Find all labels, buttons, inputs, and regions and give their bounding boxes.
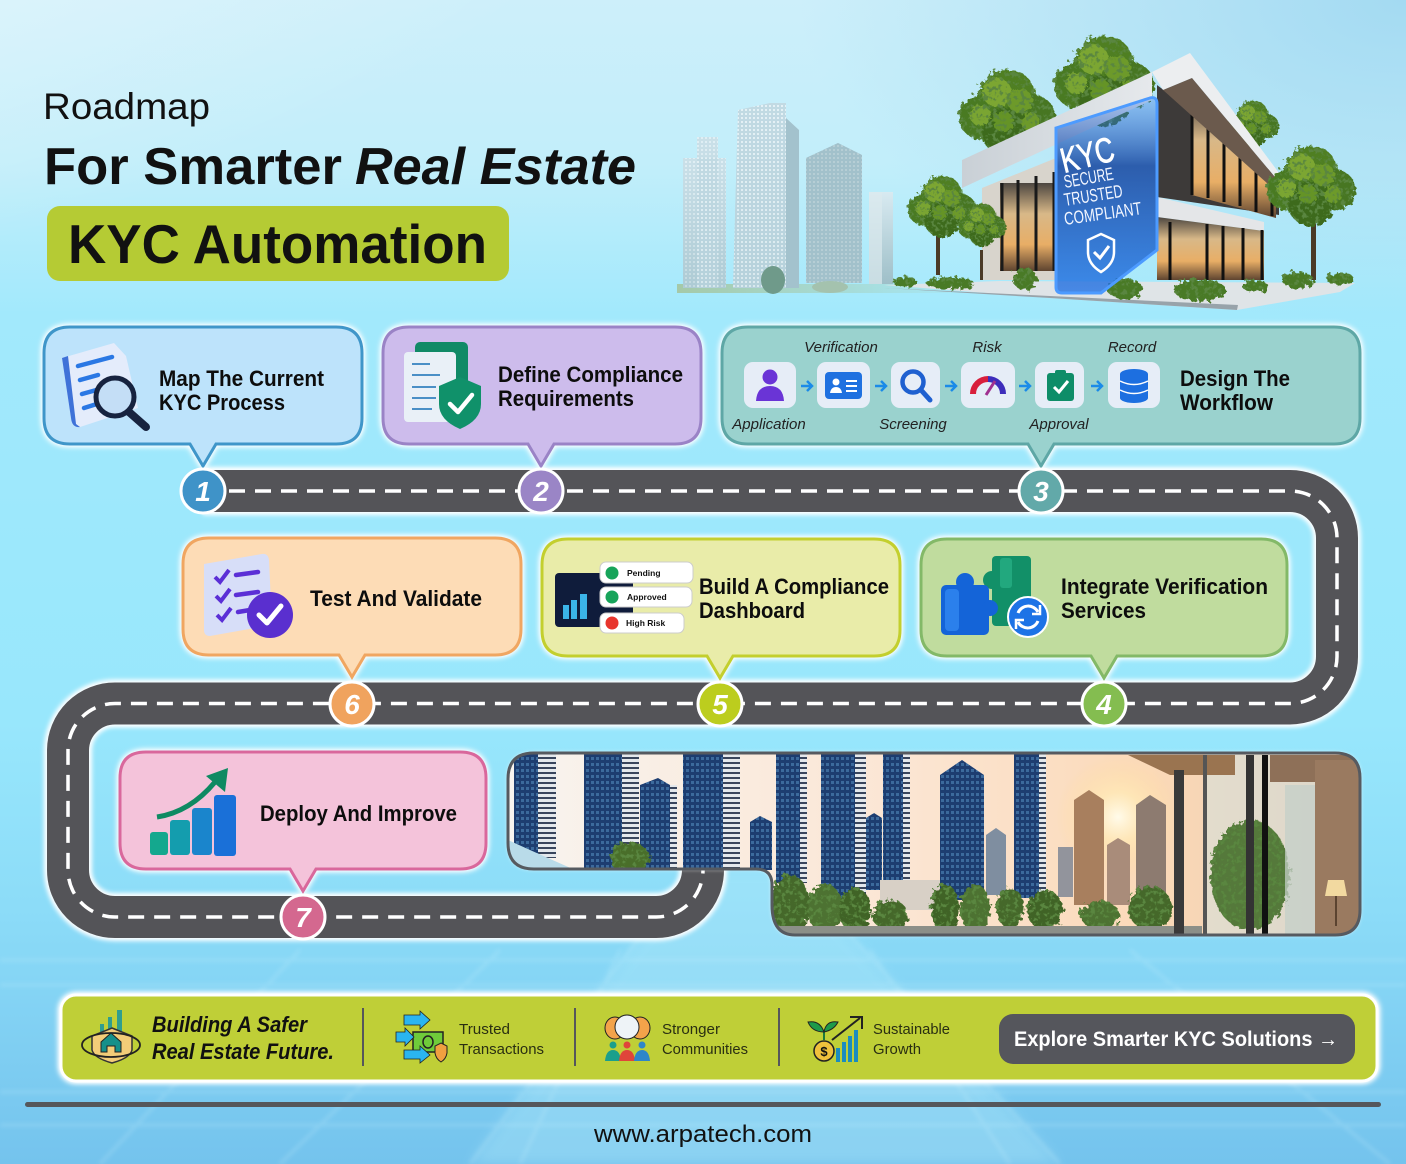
tagline: Real Estate Future. <box>152 1039 334 1064</box>
icon: approval clipboard <box>1047 370 1074 401</box>
workflow labels: Record <box>1108 339 1157 356</box>
front trees <box>908 146 1355 280</box>
step marker 7: 7 <box>295 902 312 933</box>
workflow labels: Approval <box>1028 416 1089 433</box>
hero image: pale skyline <box>677 103 977 294</box>
step marker 1 <box>181 469 225 513</box>
glass KYC panel: TRUSTED <box>1062 181 1124 210</box>
step marker 3: 3 <box>1033 476 1049 507</box>
step marker 5 <box>698 682 742 726</box>
step 4 bubble: Integrate Verification Services: Services <box>1061 598 1146 623</box>
icon: sustainable growth <box>808 1017 862 1062</box>
bottom benefits band: Trusted <box>459 1021 510 1038</box>
icon: record database <box>1120 369 1148 403</box>
glass KYC panel: SECURE <box>1062 164 1115 192</box>
title block: For Smarter <box>44 138 342 196</box>
step 3 bubble: Design The Workflow <box>722 327 1360 466</box>
icon: puzzle pieces with sync <box>941 556 1048 637</box>
bottom benefits band: Sustainable <box>873 1021 950 1038</box>
step 7 bubble: Deploy And Improve: Deploy And Improve <box>260 801 457 826</box>
icon: dashboard with status pills: High Risk <box>626 618 665 628</box>
step marker 4 <box>1082 682 1126 726</box>
bottom benefits band: Transactions <box>459 1041 544 1058</box>
bottom benefits band: Communities <box>662 1041 748 1058</box>
house body <box>962 53 1279 280</box>
green title pill: KYC Automation <box>68 213 487 275</box>
step marker 2 <box>519 469 563 513</box>
step 4 bubble: Integrate Verification Services <box>921 539 1287 678</box>
step 5 bubble: Build A Compliance Dashboard <box>542 539 900 678</box>
step 3 bubble: Design The Workflow: Design The <box>1180 366 1290 391</box>
workflow labels: Verification <box>804 339 878 356</box>
tagline: Building A Safer <box>152 1012 308 1037</box>
step marker 4: 4 <box>1095 689 1112 720</box>
photo panel: city at sunset <box>500 750 1370 940</box>
step 5 bubble: Build A Compliance Dashboard: Build A Compliance <box>699 574 889 599</box>
step marker 1: 1 <box>195 476 211 507</box>
icon: risk gauge <box>973 379 1003 395</box>
step marker 5: 5 <box>712 689 728 720</box>
icon: dashboard with status pills: Approved <box>627 592 667 602</box>
call-to-action button: Explore Smarter KYC Solutions → <box>1014 1028 1338 1051</box>
website url: www.arpatech.com <box>593 1121 812 1148</box>
icon: document with magnifier <box>62 343 146 427</box>
workflow labels: Screening <box>879 416 947 433</box>
trees behind house <box>959 35 1279 157</box>
workflow labels: Risk <box>972 339 1003 356</box>
icon: application person <box>756 370 784 401</box>
shrubs <box>893 268 1354 301</box>
glass KYC panel: COMPLIANT <box>1063 198 1143 229</box>
workflow tiles <box>744 362 1160 408</box>
step 2 bubble: Define Compliance Requirements <box>383 327 701 466</box>
title block <box>43 86 636 196</box>
step 3 bubble: Design The Workflow: Workflow <box>1180 390 1274 415</box>
icon: dashboard with status pills <box>555 562 693 633</box>
step 1 bubble: Map The Current KYC Process: KYC Process <box>159 390 285 415</box>
title block: Real Estate <box>355 138 636 196</box>
workflow labels: Application <box>731 416 806 433</box>
icon: verification ID card <box>825 372 862 399</box>
step 1 bubble: Map The Current KYC Process: Map The Current <box>159 366 325 391</box>
workflow arrows <box>801 381 1102 391</box>
step 1 bubble: Map The Current KYC Process <box>44 327 362 466</box>
icon: dashboard with status pills: Pending <box>627 568 661 578</box>
icon: checklist with check badge <box>204 554 293 638</box>
tagline <box>152 1012 334 1064</box>
step 6 bubble: Test And Validate: Test And Validate <box>310 586 482 611</box>
step 5 bubble: Build A Compliance Dashboard: Dashboard <box>699 598 805 623</box>
step 7 bubble: Deploy And Improve <box>120 752 486 891</box>
icon: screening magnifier <box>902 372 930 400</box>
step marker 7 <box>281 895 325 939</box>
hero image: modern house with KYC panel <box>884 35 1355 310</box>
step marker 2: 2 <box>532 476 549 507</box>
title block: Roadmap <box>43 86 210 127</box>
bottom benefits band: Stronger <box>662 1021 720 1038</box>
icon: trusted transactions <box>396 1011 447 1063</box>
step marker 3 <box>1019 469 1063 513</box>
icon: house shield with orbit <box>82 1010 140 1063</box>
glass KYC panel <box>1056 98 1157 293</box>
icon: documents with shield <box>404 342 481 429</box>
step 2 bubble: Define Compliance Requirements: Requirements <box>498 386 634 411</box>
step 6 bubble: Test And Validate <box>183 538 521 677</box>
icon: growth bars with arrow <box>150 768 236 856</box>
road <box>68 491 1337 917</box>
footer rule <box>25 1102 1381 1107</box>
step 2 bubble: Define Compliance Requirements: Define Compliance <box>498 362 683 387</box>
step 4 bubble: Integrate Verification Services: Integrate Verification <box>1061 574 1268 599</box>
call-to-action button <box>999 1014 1355 1064</box>
icon: stronger communities <box>605 1015 650 1061</box>
icon: sustainable growth: $ <box>820 1044 828 1059</box>
bottom benefits band: Growth <box>873 1041 921 1058</box>
workflow labels <box>731 339 1157 433</box>
step marker 6 <box>330 682 374 726</box>
step marker 6: 6 <box>344 689 360 720</box>
glass KYC panel: KYC <box>1057 130 1118 181</box>
bottom benefits band <box>61 995 1377 1081</box>
